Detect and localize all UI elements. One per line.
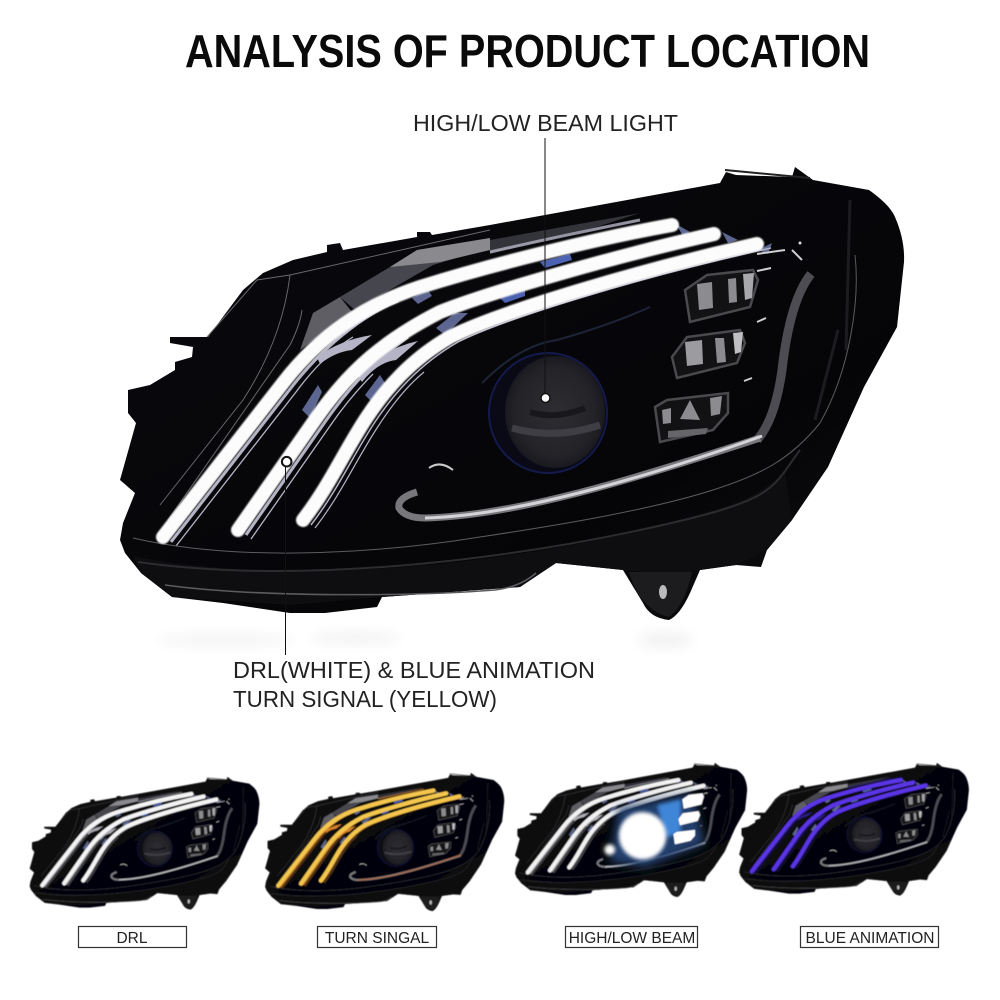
high beam glow (604, 793, 704, 867)
label: blue animation: BLUE ANIMATION (806, 930, 934, 947)
thumbnail: high/low beam (515, 763, 747, 897)
thumbnail: turn signal (265, 773, 504, 911)
label: DRL (78, 926, 186, 948)
floor reflection (155, 632, 693, 648)
thumbnail: DRL (30, 777, 259, 910)
callout: high/low beam light (413, 110, 678, 402)
callout: high/low beam light: HIGH/LOW BEAM LIGHT (413, 110, 678, 136)
thumbnail: blue animation (739, 763, 969, 896)
callout: DRL and turn signal: DRL(WHITE) & BLUE ANIMATION (233, 657, 595, 683)
label: high/low beam: HIGH/LOW BEAM (569, 930, 695, 947)
main headlight (120, 167, 904, 620)
callout: DRL and turn signal (233, 457, 595, 712)
title: ANALYSIS OF PRODUCT LOCATION (185, 25, 870, 77)
label: turn singal: TURN SINGAL (325, 930, 429, 947)
callout: DRL and turn signal: TURN SIGNAL (YELLOW) (233, 686, 497, 712)
label: DRL: DRL (116, 930, 148, 947)
